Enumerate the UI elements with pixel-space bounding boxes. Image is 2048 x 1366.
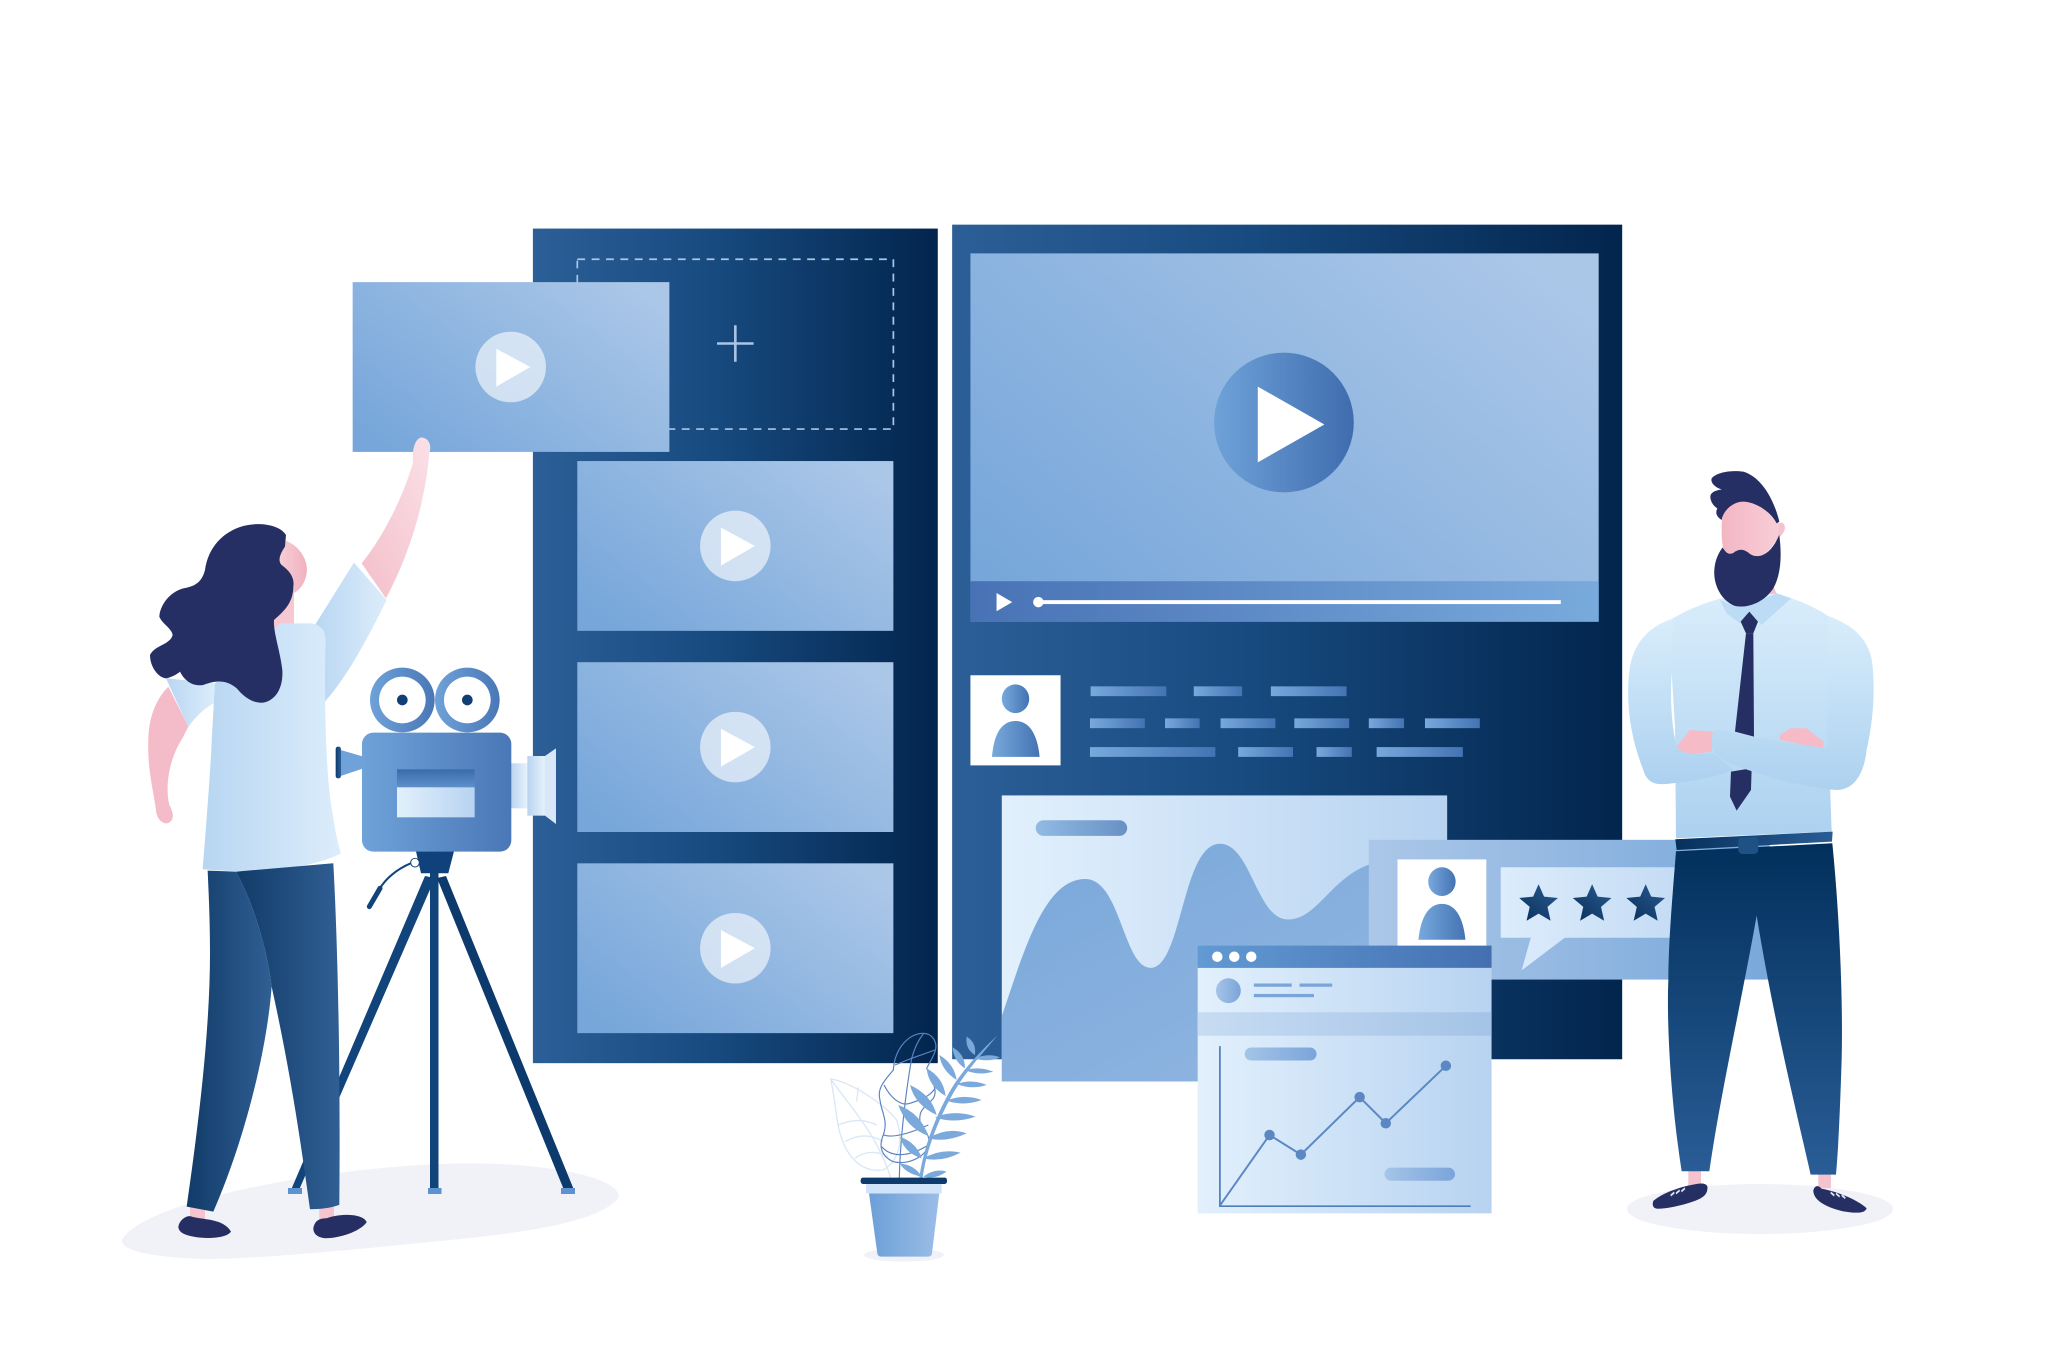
area curve — [1002, 844, 1447, 1081]
panel: floating video card — [353, 282, 669, 452]
viewfinder — [397, 769, 475, 817]
face — [1722, 493, 1779, 557]
raised arm — [362, 437, 430, 598]
divider band — [1198, 1012, 1492, 1036]
chart title pill — [1036, 820, 1127, 836]
video thumbnail 1 — [577, 461, 893, 631]
progress track — [1033, 597, 1561, 607]
character: man — [1628, 471, 1874, 1213]
title bar — [1198, 946, 1492, 968]
pot — [861, 1178, 947, 1257]
panel: area chart — [1002, 795, 1447, 1081]
rear handle — [336, 747, 363, 778]
right arm — [1712, 616, 1874, 790]
beard — [1714, 535, 1781, 607]
video thumbnail 3 — [577, 863, 893, 1033]
rating stars — [1519, 884, 1665, 921]
plant in pot — [831, 1033, 1000, 1262]
video camera — [336, 668, 556, 907]
ankles — [190, 1207, 334, 1221]
tripod — [288, 870, 575, 1194]
panel: browser window with line chart — [1198, 946, 1492, 1213]
right sleeve — [315, 563, 387, 720]
panel: video player page — [952, 225, 1622, 1059]
left sleeve — [166, 678, 215, 727]
shirt — [203, 623, 341, 871]
avatar card — [970, 675, 1061, 765]
chart axes — [1220, 1046, 1471, 1206]
description text lines — [1090, 686, 1480, 757]
ground shadow: woman and camera — [122, 1163, 619, 1259]
dashed empty slot — [577, 259, 893, 429]
right trouser leg — [236, 863, 340, 1209]
tripod feet — [288, 1188, 575, 1194]
icon: large play button — [1214, 353, 1354, 492]
film reels — [370, 668, 500, 732]
tripod mount and strap — [369, 850, 454, 907]
pot shadow — [864, 1248, 944, 1262]
camera body — [362, 733, 511, 852]
shoes — [178, 1215, 367, 1238]
lens — [510, 748, 556, 824]
face — [277, 541, 307, 593]
trousers — [1668, 843, 1842, 1175]
icon: small play — [997, 593, 1012, 611]
rear arm — [148, 687, 188, 823]
ankles — [1688, 1168, 1831, 1188]
left arm — [1628, 619, 1733, 784]
hair — [1710, 471, 1779, 523]
neck — [1760, 587, 1777, 602]
panel: review card — [1369, 840, 1770, 980]
ground shadow: man — [1627, 1184, 1893, 1234]
ear — [1776, 523, 1785, 539]
panel: video list — [533, 229, 938, 1063]
belt — [1675, 832, 1833, 854]
character: woman — [148, 437, 430, 1238]
video screen — [970, 253, 1599, 622]
tie — [1730, 612, 1758, 811]
avatar card — [1398, 859, 1486, 948]
player control bar — [970, 581, 1599, 622]
hair — [150, 524, 294, 703]
hands — [1677, 728, 1823, 755]
line series — [1220, 1061, 1451, 1206]
panels and windows — [353, 225, 1770, 1213]
neck — [273, 587, 294, 633]
chart pills — [1245, 1047, 1455, 1181]
left trouser leg — [187, 871, 272, 1212]
speech bubble — [1501, 867, 1685, 970]
torso shirt — [1670, 593, 1832, 838]
video thumbnail 2 — [577, 662, 893, 832]
icon: plus — [717, 325, 754, 362]
collar — [1720, 593, 1791, 625]
shoes and laces — [1653, 1183, 1867, 1213]
veined leaf outline — [879, 1033, 936, 1178]
pale leaf outline — [831, 1079, 900, 1178]
fern — [898, 1035, 1000, 1178]
user row — [1216, 978, 1332, 1003]
